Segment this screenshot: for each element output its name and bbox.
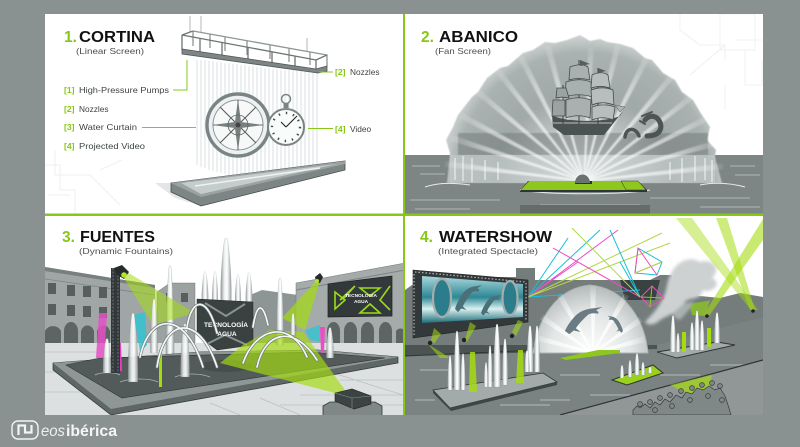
plaza floor xyxy=(45,343,403,415)
fan screen with dolphins xyxy=(533,285,648,360)
panel: 2 Abanico xyxy=(405,14,763,215)
logo: eosibérica xyxy=(12,421,117,440)
labels list: [2] xyxy=(64,104,75,114)
right labels xyxy=(335,67,380,134)
title: 1. Cortina: CORTINA xyxy=(79,29,155,46)
lasers xyxy=(528,228,670,297)
water arches xyxy=(140,304,317,367)
right labels: [2] xyxy=(335,67,346,77)
title: 4. Watershow xyxy=(420,229,552,256)
laser wireframe lower xyxy=(641,286,664,307)
water curtain xyxy=(197,60,317,176)
labels list: High-Pressure Pumps xyxy=(79,85,169,95)
stage lights on quay xyxy=(428,320,523,358)
panel: 3 Fuentes xyxy=(45,216,405,416)
labels list: [1] xyxy=(64,85,75,95)
ship xyxy=(552,60,625,135)
title: 1. Cortina: (Linear Screen) xyxy=(76,46,144,56)
labels list: [3] xyxy=(64,122,75,132)
right labels: Video xyxy=(350,124,371,134)
promenade xyxy=(560,360,763,415)
title: 1. Cortina xyxy=(64,29,155,56)
right fountain platform xyxy=(657,311,735,358)
panel: 4 Watershow xyxy=(405,216,763,415)
background buildings xyxy=(45,263,405,345)
lighting tower xyxy=(111,265,323,373)
right labels: Nozzles xyxy=(350,67,380,77)
fountain basin xyxy=(53,350,398,415)
labels list: Projected Video xyxy=(79,141,145,151)
title: 3. Fuentes xyxy=(62,229,173,256)
fan screen xyxy=(425,35,745,194)
pocket watch on water xyxy=(268,94,304,145)
title: 4. Watershow: (Integrated Spectacle) xyxy=(438,246,538,256)
labels list: Water Curtain xyxy=(79,122,137,132)
title: 4. Watershow: 4. xyxy=(420,229,433,246)
title: 4. Watershow: WATERSHOW xyxy=(439,229,552,246)
logo: eosibérica: ibérica xyxy=(66,423,117,440)
laser wireframe upper xyxy=(635,248,662,275)
projector on pedestal xyxy=(323,389,382,416)
title: 2. Abanico xyxy=(422,31,518,56)
logo: eosibérica: eos xyxy=(41,423,65,440)
rear centre fountains xyxy=(166,238,284,360)
labels list: [4] xyxy=(64,141,75,151)
title: 2. Abanico: (Fan Screen) xyxy=(435,46,491,56)
centre LED screen: AGUA xyxy=(217,331,237,338)
right LED screen: TECNOLOGÍA xyxy=(345,291,378,299)
compass on water xyxy=(207,94,269,156)
coloured light beams xyxy=(96,312,325,387)
river water xyxy=(405,345,763,415)
truss: high-pressure pumps and nozzles xyxy=(182,16,327,73)
left fountain platform xyxy=(433,324,557,411)
title: 3. Fuentes: 3. xyxy=(62,229,75,246)
labels list xyxy=(64,85,169,151)
panel: 1 Cortina xyxy=(45,14,403,214)
right LED screen xyxy=(328,276,392,317)
sea serpent xyxy=(625,112,661,137)
title: 2. Abanico: 2. xyxy=(421,29,434,46)
title: 1. Cortina: 1. xyxy=(64,29,77,46)
LED video wall xyxy=(413,270,528,338)
skyline xyxy=(405,268,763,345)
sea xyxy=(405,155,763,215)
leader arrows xyxy=(142,60,333,128)
fan rays xyxy=(445,44,724,184)
fan nozzle platform xyxy=(520,174,647,192)
centre small platform xyxy=(612,353,663,385)
centre LED screen xyxy=(197,299,253,350)
right labels: [4] xyxy=(335,124,346,134)
smoke xyxy=(645,259,717,324)
crowd xyxy=(633,381,731,415)
collecting basin xyxy=(155,161,345,206)
right LED screen: AGUA xyxy=(354,299,369,305)
front fountain jets xyxy=(103,299,334,382)
centre LED screen: TECNOLOGÍA xyxy=(204,320,248,329)
labels list: Nozzles xyxy=(79,104,109,114)
title: 2. Abanico: ABANICO xyxy=(439,29,518,46)
title: 3. Fuentes: (Dynamic Fountains) xyxy=(79,246,173,256)
green sky beams xyxy=(676,218,763,318)
green spot beams xyxy=(122,272,345,393)
title: 3. Fuentes: FUENTES xyxy=(80,229,155,246)
